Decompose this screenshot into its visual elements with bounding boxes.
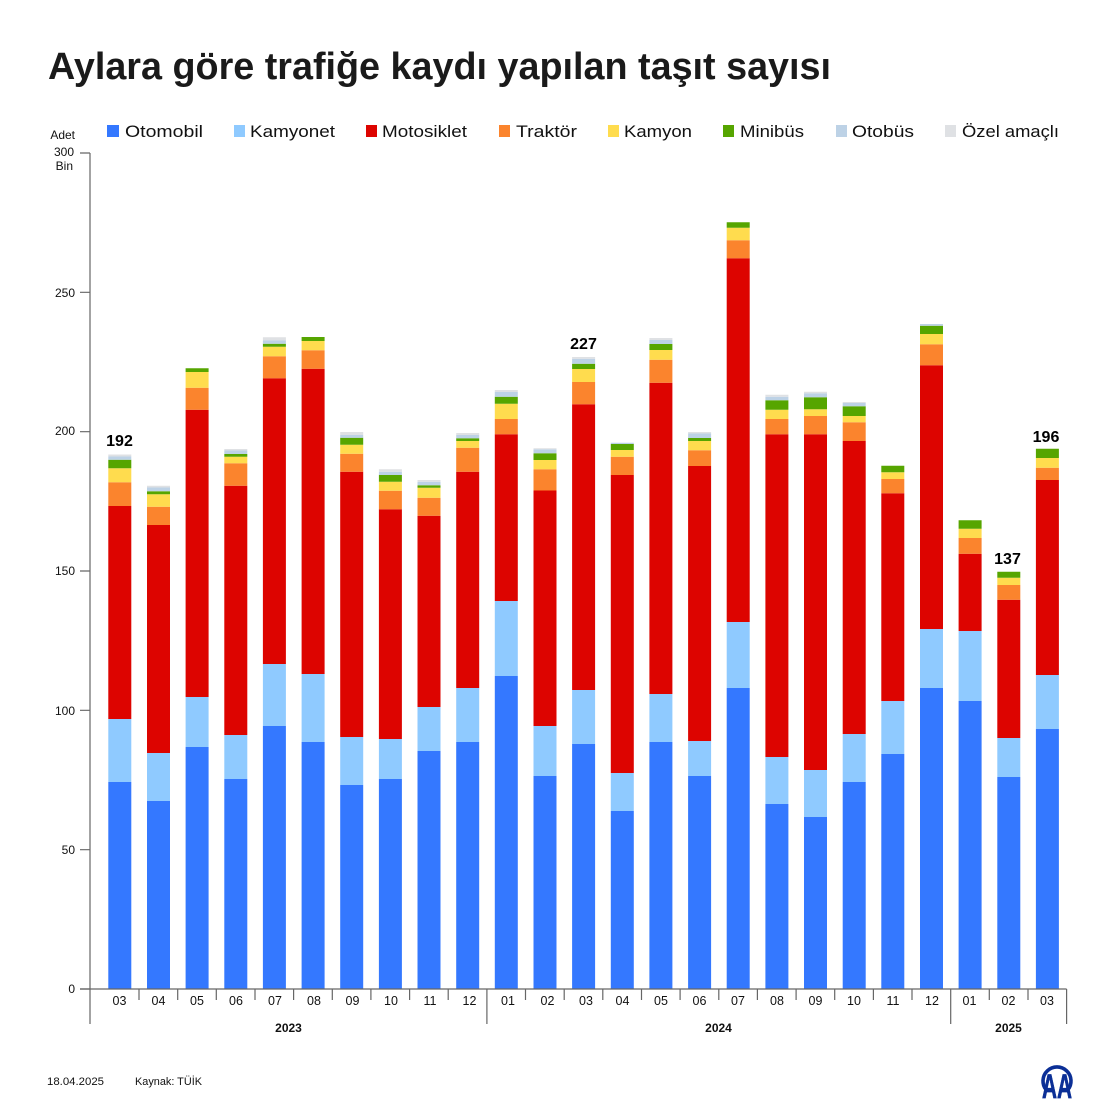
x axis: 03	[1040, 994, 1054, 1008]
y axis: Adet	[50, 128, 76, 142]
value label: 192: 192	[106, 433, 133, 450]
bar 2025-03	[1036, 449, 1059, 989]
bar 2024-04	[611, 443, 634, 989]
x axis: 03	[113, 994, 126, 1008]
y axis: 0	[68, 982, 75, 996]
x axis: 10	[847, 994, 861, 1008]
bar 2024-06	[688, 432, 711, 989]
legend: Motosiklet: Motosiklet	[382, 122, 467, 141]
x axis: 07	[268, 994, 282, 1008]
x axis: 2024	[705, 1021, 732, 1035]
x axis: 08	[770, 994, 784, 1008]
bar 2025-01	[959, 520, 982, 989]
legend: Kamyonet: Kamyonet	[250, 122, 335, 141]
y axis: 50	[62, 843, 75, 857]
x axis	[80, 989, 1067, 1035]
y axis: 150	[55, 564, 75, 578]
legend: Özel amaçlı: Özel amaçlı	[962, 122, 1059, 141]
y axis: 100	[55, 704, 75, 718]
bar 2023-10	[379, 469, 402, 989]
bar 2023-08	[302, 337, 325, 989]
legend: Traktör	[499, 122, 577, 141]
icon: AA logo: AA	[1042, 1068, 1072, 1106]
x axis: 11	[887, 994, 900, 1008]
x axis: 04	[152, 994, 165, 1008]
x axis: 02	[541, 994, 554, 1008]
x axis: 05	[190, 994, 204, 1008]
bar 2024-12	[920, 324, 943, 989]
legend: Kamyon: Kamyon	[624, 122, 692, 141]
value label: 196: 196	[1033, 429, 1059, 446]
stacked bar chart	[108, 222, 1059, 989]
x axis: 03	[579, 994, 593, 1008]
icon: AA logo	[1042, 1067, 1072, 1106]
x axis: 2023	[275, 1021, 302, 1035]
x axis: 09	[346, 994, 359, 1008]
x axis: 12	[925, 994, 939, 1008]
bar 2024-08	[765, 395, 788, 989]
y axis: 250	[55, 286, 75, 300]
y axis: 200	[55, 424, 75, 438]
x axis: 05	[654, 994, 668, 1008]
bar 2023-11	[418, 480, 440, 989]
x axis: 04	[616, 994, 629, 1008]
bar 2023-09	[340, 432, 363, 989]
y axis: 300	[54, 145, 74, 159]
y axis: Bin	[56, 159, 73, 173]
bar 2024-07	[727, 222, 750, 989]
title: Aylara göre trafiğe kaydı yapılan taşıt sayısı	[48, 46, 831, 88]
x axis: 06	[229, 994, 243, 1008]
x axis: 01	[501, 994, 515, 1008]
x axis: 06	[693, 994, 706, 1008]
x axis: 07	[731, 994, 745, 1008]
footer: source: Kaynak: TÜİK	[135, 1075, 203, 1088]
x axis: 01	[963, 994, 976, 1008]
legend: Traktör: Traktör	[516, 122, 577, 141]
bar 2024-01	[495, 390, 518, 989]
value label: 227: 227	[570, 336, 597, 353]
bar 2024-02	[534, 448, 556, 989]
bar 2023-06	[224, 449, 247, 989]
x axis: 2025	[995, 1021, 1022, 1035]
x axis: 09	[809, 994, 822, 1008]
footer: date: 18.04.2025	[47, 1076, 104, 1088]
x axis: 02	[1002, 994, 1015, 1008]
x axis: 08	[307, 994, 321, 1008]
x axis: 11	[424, 994, 437, 1008]
bar 2024-10	[843, 402, 866, 989]
bar 2023-03	[108, 454, 131, 989]
x axis: 10	[384, 994, 398, 1008]
bar 2024-03	[572, 357, 595, 989]
bar 2024-05	[649, 338, 672, 989]
bar 2024-11	[881, 466, 904, 989]
legend	[107, 122, 1059, 141]
y axis	[50, 128, 90, 1024]
bar 2024-09	[804, 392, 827, 989]
x axis: 12	[463, 994, 476, 1008]
bar 2023-05	[186, 368, 209, 989]
legend: Otomobil: Otomobil	[125, 122, 203, 141]
bar 2023-04	[147, 486, 170, 989]
bar 2023-12	[456, 433, 479, 989]
legend: Otobüs: Otobüs	[852, 122, 914, 141]
legend: Minibüs: Minibüs	[740, 122, 804, 141]
value label: 137: 137	[994, 551, 1021, 568]
bar 2025-02	[997, 572, 1020, 989]
bar 2023-07	[263, 337, 286, 989]
